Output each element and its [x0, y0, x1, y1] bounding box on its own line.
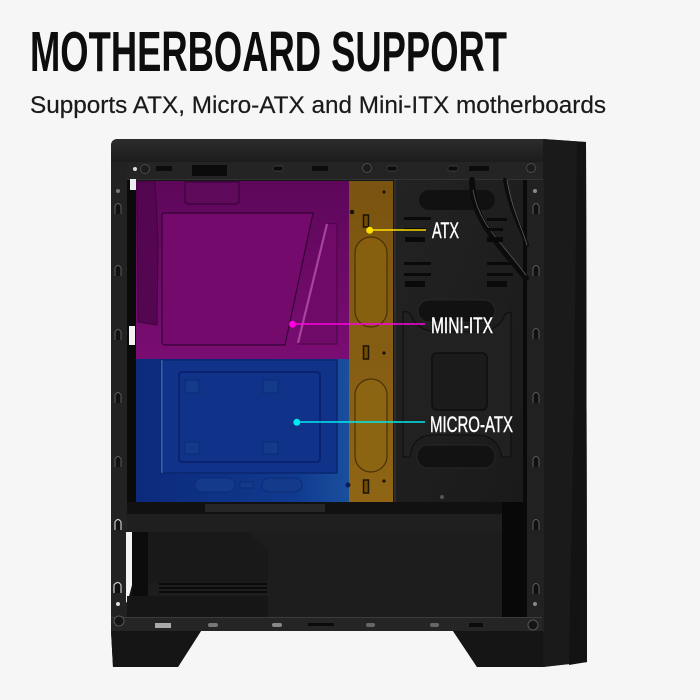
raised plate outline	[403, 312, 511, 457]
callout: ATX: ATX	[432, 218, 459, 243]
case body	[111, 139, 587, 667]
motherboard zone: Micro-ATX	[136, 359, 350, 502]
front panel	[543, 139, 587, 667]
callout: MICRO-ATX	[293, 412, 513, 437]
lower bay	[127, 502, 523, 617]
callout: MINI-ITX	[289, 313, 493, 338]
case feet	[111, 631, 543, 667]
top band	[111, 139, 544, 162]
subtitle: Supports ATX, Micro-ATX and Mini-ITX motherboards	[30, 92, 606, 119]
cables	[472, 180, 527, 278]
ventilation slits	[404, 217, 513, 287]
bottom frame rail	[111, 616, 542, 631]
back panel: black metal plate	[394, 180, 527, 502]
PC case photo	[111, 139, 587, 667]
motherboard zone: ATX strip	[349, 181, 393, 502]
top frame rail	[112, 162, 543, 180]
left frame rail	[111, 162, 136, 632]
callout: MICRO-ATX: MICRO-ATX	[430, 412, 513, 437]
motherboard zone: Mini-ITX	[136, 181, 349, 359]
callout: MINI-ITX: MINI-ITX	[431, 313, 493, 338]
right frame rail	[523, 180, 544, 632]
callout: ATX	[366, 218, 459, 243]
